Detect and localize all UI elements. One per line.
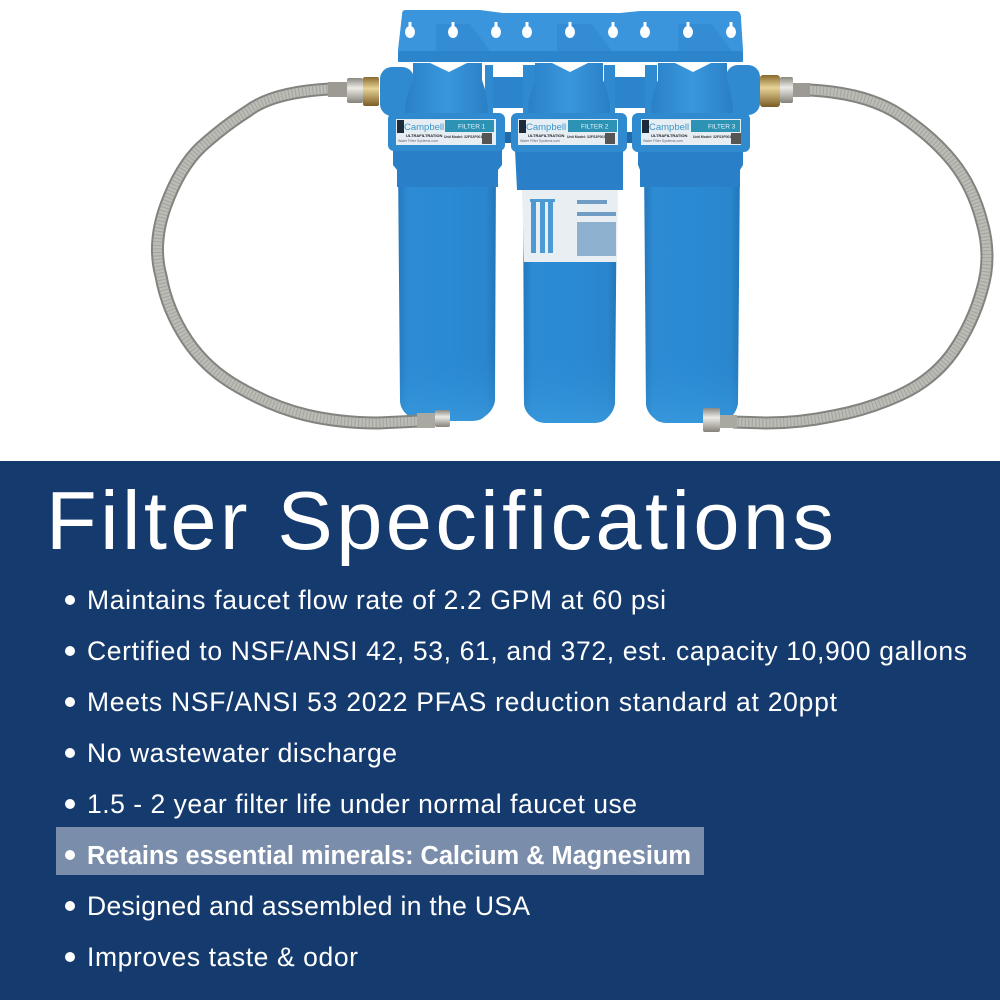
left braided hose — [157, 89, 420, 423]
filter 3: Campbell — [649, 122, 689, 133]
filter 3: Water Filter Systems.com — [643, 139, 683, 143]
product photo: three-stage water filter — [157, 10, 987, 432]
filter 3: Unit Model: 32FS3F003 — [693, 135, 731, 139]
panel: filter specifications — [0, 461, 1000, 1000]
filter 2: ULTRAFILTRATION — [528, 133, 565, 138]
side port left — [380, 67, 414, 116]
filter 3: FILTER 3 — [708, 124, 736, 130]
left inlet fitting — [328, 77, 379, 106]
filter 3: ULTRAFILTRATION — [651, 133, 688, 138]
filter 1: Unit Model: 32FS3F001 — [444, 135, 482, 139]
filter 3 — [632, 63, 750, 423]
title: Filter Specifications — [46, 474, 834, 567]
side port right — [726, 65, 760, 115]
bullet 6 highlighted: Retains essential minerals: Calcium & Magnesium — [87, 842, 691, 870]
bullet 7: Designed and assembled in the USA — [87, 891, 530, 921]
spec list — [65, 585, 967, 972]
filter 2 white wrap label — [522, 190, 618, 262]
bullet 3: Meets NSF/ANSI 53 2022 PFAS reduction standard at 20ppt — [87, 687, 838, 717]
bullet 5: 1.5 - 2 year filter life under normal faucet use — [87, 789, 637, 819]
bullet 4: No wastewater discharge — [87, 738, 397, 768]
filter 2: Unit Model: 32FS3F002 — [567, 135, 605, 139]
filter 1 — [388, 63, 505, 421]
right braided hose — [733, 90, 987, 423]
bottom right hose fitting — [703, 408, 737, 432]
wall mount bracket — [398, 10, 743, 62]
filter 2: Water Filter Systems.com — [520, 139, 560, 143]
filter 1: ULTRAFILTRATION — [406, 133, 443, 138]
keyhole mounting slots — [405, 22, 736, 38]
filter 1: Water Filter Systems.com — [398, 139, 438, 143]
bullet 8: Improves taste & odor — [87, 942, 358, 972]
right outlet fitting — [760, 75, 810, 107]
filter 1: FILTER 1 — [458, 124, 486, 130]
bullet 1: Maintains faucet flow rate of 2.2 GPM at 60 psi — [87, 585, 666, 615]
filter 2: Campbell — [526, 122, 566, 133]
filter 1: Campbell — [404, 122, 444, 133]
filter 2 — [511, 63, 627, 423]
cross pipes — [490, 77, 648, 143]
filter 2: FILTER 2 — [581, 124, 609, 130]
bottom left hose fitting — [417, 410, 450, 428]
background — [0, 0, 1000, 461]
bullet 2: Certified to NSF/ANSI 42, 53, 61, and 372, est. capacity 10,900 gallons — [87, 636, 967, 666]
highlight band — [56, 827, 704, 875]
